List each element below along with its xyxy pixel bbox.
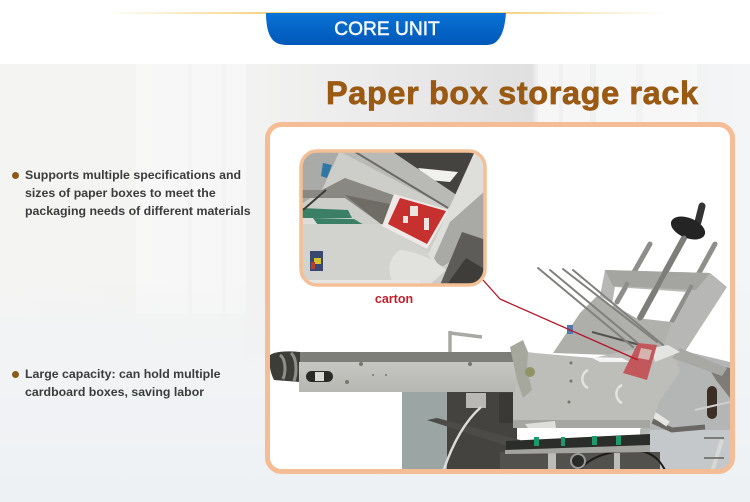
red leader line: [483, 280, 638, 360]
bullet: capacity: Large capacity: can hold multiple: [25, 367, 220, 381]
title: Paper box storage rack: [326, 75, 699, 111]
lower dark base: [500, 452, 660, 469]
machine illustration: [270, 206, 730, 472]
white slot: [590, 357, 630, 362]
blue sensor: [567, 325, 573, 334]
decorative header line: [116, 12, 654, 14]
inset: carton close-up: [299, 149, 487, 287]
highlighted small carton: [623, 343, 657, 380]
sloped hopper body: [553, 296, 641, 355]
bullet: specifications: Supports multiple specifications and: [25, 168, 241, 182]
panel border: [268, 124, 732, 472]
bullet: specifications: sizes of paper boxes to meet the: [25, 186, 216, 200]
feed belt beam: [300, 352, 515, 363]
bullet: capacity: [12, 367, 220, 399]
label: carton: carton: [375, 292, 413, 306]
lower right background machinery: [640, 352, 730, 434]
rods in front of window: [640, 238, 684, 318]
small bracket: [450, 331, 482, 352]
carton: [382, 194, 449, 249]
guide rail with green clips: [506, 434, 650, 451]
header tab: CORE UNIT: CORE UNIT: [334, 19, 440, 40]
side plate: [513, 350, 680, 428]
bullet: specifications: [12, 168, 251, 218]
panel: machine photo: [265, 122, 735, 474]
header tab: CORE UNIT: [266, 13, 506, 45]
guide fingers: [538, 268, 663, 347]
panel background: [268, 124, 732, 472]
bullet: specifications: packaging needs of different materials: [25, 204, 251, 218]
upper frame: [600, 270, 727, 355]
handwheel: [670, 216, 706, 240]
bullet: capacity: cardboard boxes, saving labor: [25, 385, 204, 399]
rear lower housing: [402, 392, 448, 472]
rods behind frame: [617, 206, 715, 322]
